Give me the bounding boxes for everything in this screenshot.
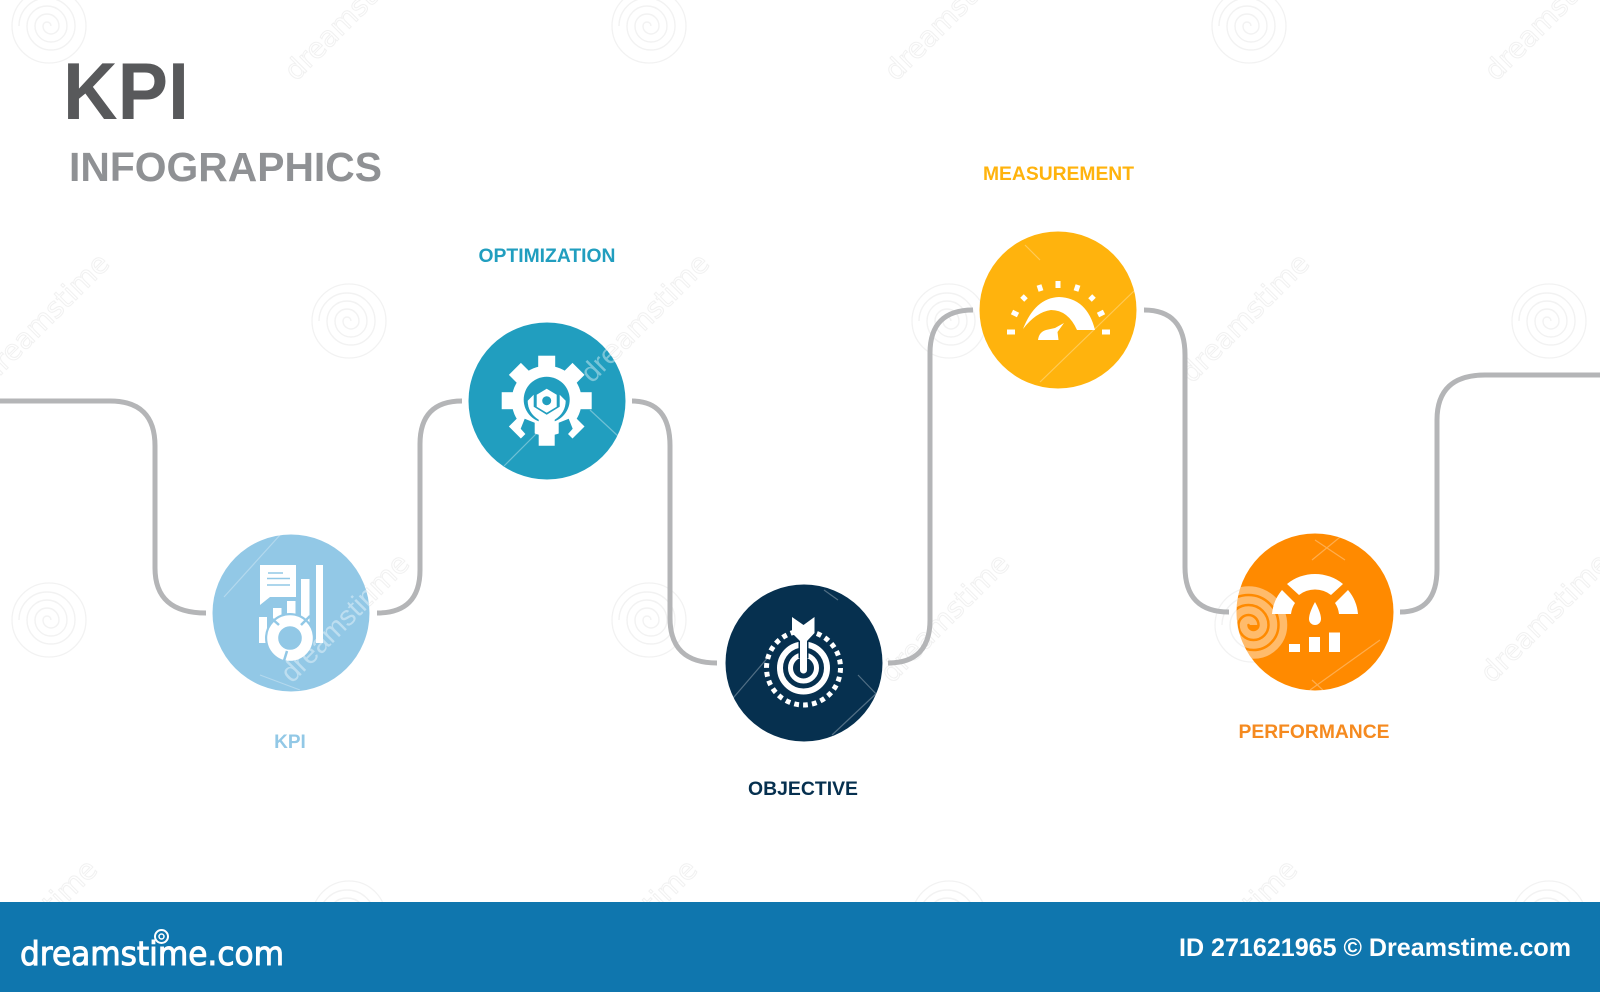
watermark text and streaks over circles: [224, 245, 1380, 735]
watermark text and streaks over circles: dreamstime: [574, 263, 700, 388]
connector: KPI to optimization: [377, 401, 462, 613]
circle: KPI: [212, 534, 370, 692]
background watermark pattern: dreamstime: [274, 547, 416, 689]
background watermark pattern: dreamstime: [574, 247, 716, 389]
step 3: objective: [726, 584, 882, 742]
circle: performance: [1236, 534, 1394, 690]
connector: measurement to performance: [1144, 310, 1229, 612]
title: KPI: KPI: [63, 47, 189, 137]
step 5: performance: [1236, 534, 1394, 690]
label: OPTIMIZATION: OPTIMIZATION: [478, 246, 616, 267]
label: PERFORMANCE: PERFORMANCE: [1238, 722, 1390, 743]
watermark spiral over circle: [1236, 586, 1288, 659]
icon: gauge with bars: [1272, 574, 1358, 652]
icon: chart with speech bubble and donut: [259, 565, 323, 664]
icon: gear with wrench: [502, 356, 592, 446]
watermark text and streaks over circles: dreamstime: [274, 563, 400, 688]
label: MEASUREMENT: MEASUREMENT: [983, 164, 1134, 185]
background watermark pattern: dreamstime: [1174, 247, 1316, 389]
connector: objective to measurement: [888, 310, 973, 663]
step 1: KPI: [212, 534, 370, 692]
background watermark pattern: dreamstime: [1162, 853, 1304, 992]
circle: objective: [726, 584, 882, 742]
connector: optimization to objective: [632, 401, 717, 663]
circle: optimization: [468, 322, 626, 480]
step 2: optimization: [468, 322, 626, 480]
background watermark pattern: dreamstime: [562, 853, 704, 992]
subtitle: INFOGRAPHICS: INFOGRAPHICS: [69, 144, 382, 190]
circle: measurement: [980, 232, 1136, 388]
icon: dart in target: [766, 617, 840, 705]
footer bar: [0, 902, 1600, 992]
background watermark pattern: dreamstime: [874, 547, 1016, 689]
step 4: measurement: [980, 232, 1136, 388]
footer logo: dreamstime.com: dreamstime.com: [20, 934, 284, 973]
connector: performance to right edge: [1400, 375, 1600, 612]
connector: left edge to KPI: [0, 401, 206, 613]
label: OBJECTIVE: OBJECTIVE: [748, 779, 858, 800]
footer ID credit: ID 271621965 © Dreamstime.com: [1179, 934, 1571, 962]
label: KPI: KPI: [274, 732, 306, 753]
icon: speedometer: [1007, 281, 1110, 340]
